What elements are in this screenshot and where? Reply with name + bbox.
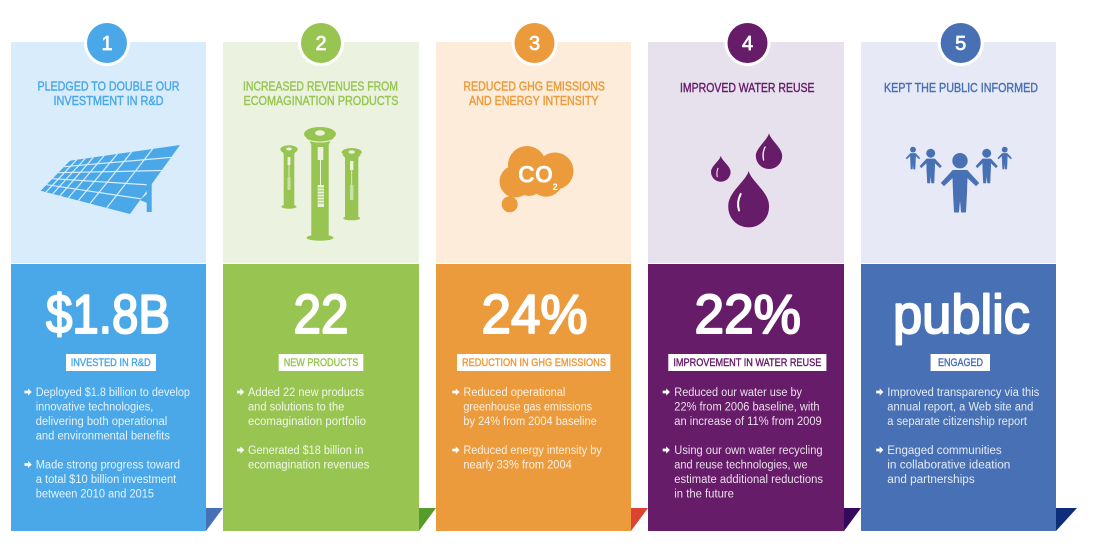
label: new products: NEW PRODUCTS [284, 357, 358, 369]
bullets: column 1: delivering both operational [36, 416, 167, 428]
bottom panel: column 1 [11, 264, 206, 531]
icon: water drops [711, 133, 782, 227]
heading: column 2 [243, 80, 398, 108]
fold: column 3 [631, 508, 648, 531]
heading: column 3 [463, 80, 605, 108]
bullets: column 4: 22% from 2006 baseline, with [674, 401, 820, 413]
bullets: column 5: in collaborative ideation [887, 459, 1010, 471]
bullets: column 4: Using our own water recycling [674, 445, 823, 457]
bullets: column 3 [452, 387, 602, 471]
bottom panel: column 2 [223, 264, 419, 531]
label: reduction in GHG emissions: REDUCTION IN GHG EMISSIONS [462, 357, 606, 369]
top panel: column 4 [648, 42, 844, 263]
heading: column 2: ECOMAGINATION PRODUCTS [244, 94, 398, 108]
panel: column 2 products [223, 20, 436, 531]
label: improvement in water reuse: IMPROVEMENT IN WATER REUSE [673, 357, 821, 369]
panel: column 3 emissions [436, 20, 648, 531]
top panel: column 5 [861, 42, 1056, 263]
bullets: column 5: Improved transparency via this [887, 387, 1040, 399]
big figure: 24%: 24% [482, 283, 588, 345]
heading: column 1: PLEDGED TO DOUBLE OUR [38, 80, 180, 94]
number badge 5: 5 [955, 33, 966, 55]
panel: column 5 public [861, 20, 1077, 531]
big figure: 22%: 22% [694, 283, 801, 345]
bullets: column 1: between 2010 and 2015 [36, 488, 154, 500]
label: engaged [931, 354, 990, 371]
number badge 4: 4 [742, 33, 753, 55]
bullets: column 2: and solutions to the [248, 401, 344, 413]
top panel: column 2 [223, 42, 419, 263]
bullets: column 4: estimate additional reductions [674, 474, 823, 486]
bullets: column 3: by 24% from 2004 baseline [463, 416, 597, 428]
heading: column 2: INCREASED REVENUES FROM [243, 80, 398, 94]
heading: column 3: REDUCED GHG EMISSIONS [463, 80, 605, 94]
icon: CO2 cloud: CO [518, 162, 553, 189]
label: new products [279, 354, 363, 371]
big figure: 22: 22 [294, 283, 348, 345]
bullets: column 5: a separate citizenship report [887, 416, 1028, 428]
bullets: column 3: Reduced energy intensity by [463, 445, 602, 457]
bullets: column 2: ecomagination revenues [248, 459, 370, 471]
bullets: column 2: Added 22 new products [248, 387, 364, 399]
bullets: column 1 [24, 387, 190, 500]
number badge 3: 3 [529, 33, 540, 55]
bullets: column 1: and environmental benefits [36, 430, 170, 442]
icon: test tubes [280, 127, 362, 241]
heading: column 1 [38, 80, 180, 108]
bottom panel: column 3 [436, 264, 631, 531]
number badge 5 [938, 20, 984, 66]
icon: solar panel [41, 145, 180, 214]
label: engaged: ENGAGED [938, 357, 983, 369]
heading: column 5: KEPT THE PUBLIC INFORMED [884, 81, 1038, 95]
number badge 3 [512, 20, 558, 66]
heading: column 1: INVESTMENT IN R&D [54, 94, 164, 108]
fold: column 4 [844, 508, 861, 531]
bullets: column 5: and partnerships [887, 474, 975, 486]
number badge 1: 1 [101, 33, 113, 55]
bottom panel: column 4 [648, 264, 844, 531]
bullets: column 4: an increase of 11% from 2009 [674, 416, 822, 428]
bullets: column 4 [663, 387, 823, 500]
bullets: column 3: Reduced operational [463, 387, 565, 399]
bullets: column 4: Reduced our water use by [674, 387, 802, 399]
panel: column 1 R&D [11, 20, 223, 531]
bullets: column 1: innovative technologies, [36, 401, 153, 413]
bullets: column 2: ecomagination portfolio [248, 416, 366, 428]
number badge 2 [298, 20, 344, 66]
top panel: column 3 [436, 42, 631, 263]
fold: column 5 [1056, 508, 1077, 531]
label: invested in R&D [66, 354, 156, 371]
bottom panel: column 5 [861, 264, 1056, 531]
fold: column 1 [206, 508, 223, 531]
label: reduction in GHG emissions [457, 354, 610, 371]
number badge 4 [724, 20, 770, 66]
bullets: column 3: greenhouse gas emissions [463, 401, 592, 413]
panel: column 4 water [648, 20, 861, 531]
bullets: column 4: in the future [674, 488, 734, 500]
bullets: column 2 [237, 387, 370, 471]
bullets: column 3: nearly 33% from 2004 [463, 459, 572, 471]
label: improvement in water reuse [668, 354, 826, 371]
big figure: public: public [893, 283, 1030, 345]
bullets: column 5: Engaged communities [887, 445, 1002, 457]
fold: column 2 [419, 508, 436, 531]
big figure: $1.8B: $1.8B [46, 283, 170, 345]
label: invested in R&D: INVESTED IN R&D [71, 357, 151, 369]
number badge 2: 2 [315, 33, 327, 55]
bullets: column 5: annual report, a Web site and [887, 401, 1033, 413]
top panel: column 1 [11, 42, 206, 263]
heading: column 3: AND ENERGY INTENSITY [469, 94, 599, 108]
bullets: column 2: Generated $18 billion in [248, 445, 363, 457]
icon: CO2 cloud: 2 [553, 182, 558, 192]
icon: group of people [906, 147, 1012, 212]
bullets: column 1: a total $10 billion investment [36, 474, 177, 486]
bullets: column 1: Made strong progress toward [36, 459, 180, 471]
bullets: column 4: and reuse technologies, we [674, 459, 808, 471]
heading: column 4: IMPROVED WATER REUSE [680, 81, 814, 95]
icon: CO2 cloud [500, 146, 574, 212]
bullets: column 5 [876, 387, 1040, 486]
bullets: column 1: Deployed $1.8 billion to develop [36, 387, 190, 399]
number badge 1 [84, 20, 130, 66]
